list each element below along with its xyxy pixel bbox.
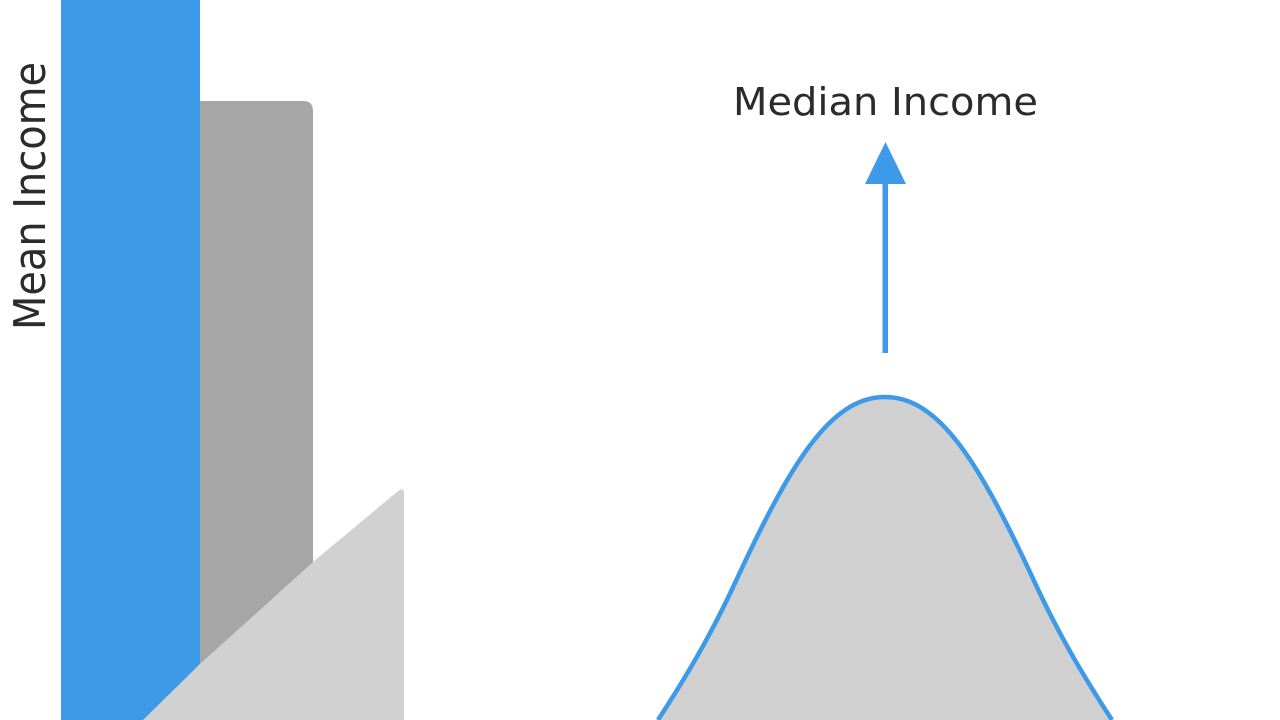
bar: tall blue (61, 0, 200, 720)
arrow: pointing up to median label (865, 142, 906, 353)
shape: light grey rising triangle (143, 489, 404, 720)
chart: bell curve distribution (658, 397, 1112, 720)
label: Median Income: Median Income (733, 80, 1038, 125)
bar: medium grey (200, 101, 313, 720)
y-axis label: Mean Income: Mean Income (5, 62, 56, 330)
